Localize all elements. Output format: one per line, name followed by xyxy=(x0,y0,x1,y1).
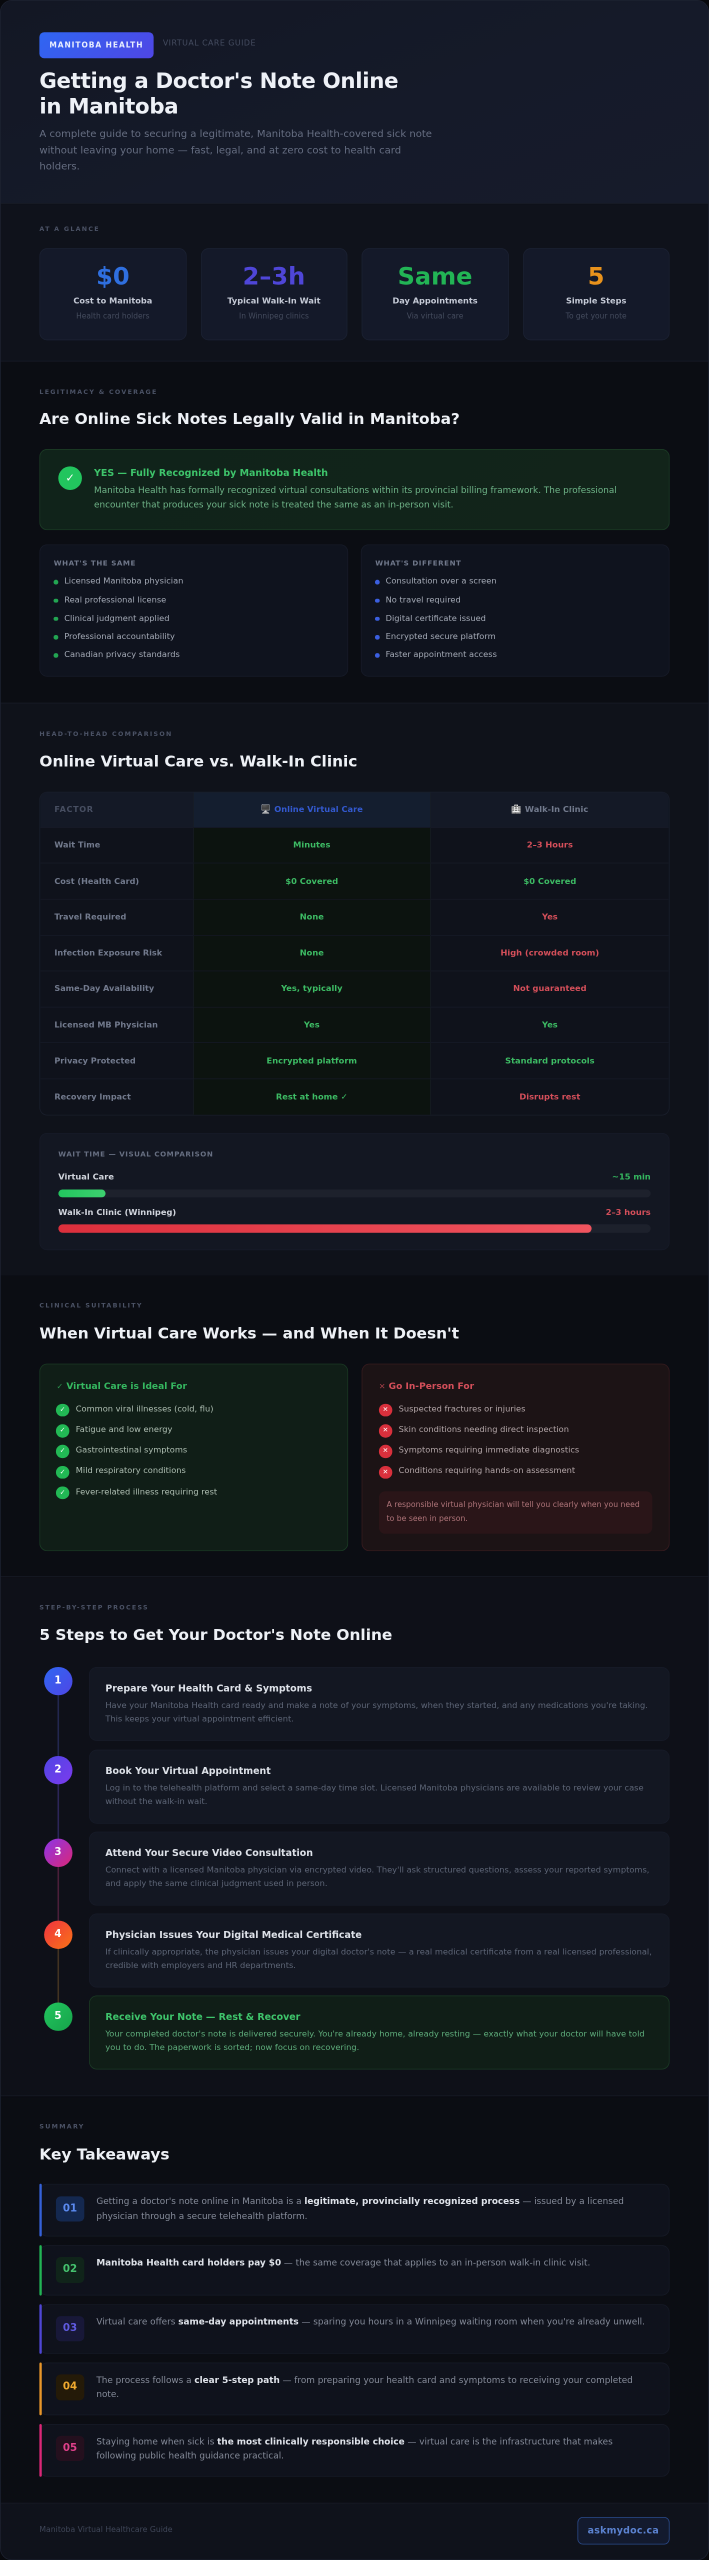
connector: step 4 to 5 xyxy=(57,1949,59,2002)
list heading: WHAT'S DIFFERENT xyxy=(375,560,461,568)
row: recovery: Recovery Impact xyxy=(54,1093,131,1102)
item: ✕ xyxy=(383,1406,388,1414)
list item: Digital certificate issued xyxy=(386,614,486,623)
section heading: When Virtual Care Works — and When It Doesn't xyxy=(39,1324,459,1342)
stat note: Health card holders xyxy=(76,312,150,320)
accent bar xyxy=(39,2245,42,2295)
step text xyxy=(105,1783,644,1806)
step text: Log in to the telehealth platform and select a same-day time slot. Licensed Manitoba physicians are available to review your case xyxy=(105,1783,644,1793)
item xyxy=(56,1424,172,1438)
footer link badge xyxy=(577,2517,670,2545)
section label: SUMMARY xyxy=(39,2123,85,2130)
row: same-day: Not guaranteed xyxy=(513,984,587,994)
row: travel: Travel Required xyxy=(54,912,126,922)
subtitle: without leaving your home — fast, legal, and at zero cost to health card xyxy=(39,145,401,156)
list heading: WHAT'S THE SAME xyxy=(54,560,136,568)
list item: Canadian privacy standards xyxy=(64,650,180,660)
takeaway 1 xyxy=(39,2184,670,2237)
row: same-day xyxy=(40,971,669,1007)
item xyxy=(378,1466,575,1479)
row: cost: $0 Covered xyxy=(285,876,338,886)
item: Common viral illnesses (cold, flu) xyxy=(76,1404,213,1414)
step number 1 xyxy=(44,1667,72,1696)
stat card: wait xyxy=(200,248,347,340)
stat label: Simple Steps xyxy=(566,296,626,305)
row: travel xyxy=(40,900,669,936)
step number 4: 4 xyxy=(54,1928,61,1940)
icon: check xyxy=(58,466,82,490)
bar label: Walk-In Clinic (Winnipeg) xyxy=(58,1208,176,1217)
section label: LEGITIMACY & COVERAGE xyxy=(39,388,158,395)
step text: Your completed doctor's note is delivered securely. You're already home, already resting — exactly what your doctor will have told xyxy=(105,2029,645,2039)
table header: Walk-In Clinic xyxy=(525,805,588,814)
accent bar xyxy=(39,2362,42,2415)
row: cost: $0 Covered xyxy=(523,876,576,886)
panel: what's different xyxy=(361,544,670,677)
number badge: 03 xyxy=(63,2322,77,2334)
row: recovery xyxy=(54,1079,580,1115)
step text xyxy=(105,2029,645,2052)
stat value: $0 xyxy=(96,263,130,291)
panel: clinical suitability xyxy=(0,1276,709,1577)
panel: step-by-step process xyxy=(0,1577,709,2097)
row: physician xyxy=(40,1007,669,1043)
list item: Licensed Manitoba physician xyxy=(64,577,183,586)
item: Suspected fractures or injuries xyxy=(399,1404,525,1414)
number badge xyxy=(56,2436,85,2461)
footer xyxy=(0,2503,709,2560)
number badge xyxy=(56,2316,85,2342)
section heading: Online Virtual Care vs. Walk-In Clinic xyxy=(39,753,357,771)
bar chart: wait time xyxy=(39,1133,670,1250)
takeaway text xyxy=(96,2436,613,2461)
hero header xyxy=(0,0,709,204)
stat note: In Winnipeg clinics xyxy=(239,312,309,320)
item: Symptoms requiring immediate diagnostics xyxy=(399,1446,579,1455)
step text xyxy=(105,1701,648,1724)
step title: Attend Your Secure Video Consultation xyxy=(105,1847,313,1858)
step text: without the walk-in wait. xyxy=(105,1797,207,1806)
row: privacy: Privacy Protected xyxy=(54,1056,136,1066)
item: ✕ xyxy=(383,1447,388,1455)
item xyxy=(56,1466,186,1479)
step text: If clinically appropriate, the physician issues your digital doctor's note — a real medical certificate from a real licensed professional, xyxy=(105,1947,652,1957)
section heading: Are Online Sick Notes Legally Valid in Manitoba? xyxy=(39,410,460,428)
section heading: Key Takeaways xyxy=(39,2145,170,2163)
item: Mild respiratory conditions xyxy=(76,1466,186,1476)
stat note: To get your note xyxy=(566,312,627,320)
panel heading: ✓ Virtual Care is Ideal For xyxy=(57,1380,187,1392)
item: ✓ xyxy=(60,1406,65,1414)
callout text: Manitoba Health has formally recognized virtual consultations within its provincial billing framework. The professional xyxy=(94,485,617,496)
row: physician: Yes xyxy=(542,1020,558,1030)
stat label: Day Appointments xyxy=(392,296,478,305)
stat label: Cost to Manitoba xyxy=(73,296,152,305)
callout text xyxy=(94,485,617,510)
panel: at a glance xyxy=(0,204,709,362)
step title: Prepare Your Health Card & Symptoms xyxy=(105,1683,312,1694)
row: infection risk: Infection Exposure Risk xyxy=(54,948,162,958)
step text: and apply the same clinical judgment used in person. xyxy=(105,1879,327,1888)
panel heading: ✕ Go In-Person For xyxy=(379,1380,474,1392)
takeaway text: The process follows a clear 5-step path — from preparing your health card and symptoms to receiving your completed xyxy=(96,2375,633,2385)
step number 5: 5 xyxy=(54,2010,61,2022)
table header: 🏥 xyxy=(511,805,522,815)
connector: step 1 to 2 xyxy=(57,1696,59,1756)
note text xyxy=(386,1501,640,1524)
takeaway text: Virtual care offers same-day appointments — sparing you hours in a Winnipeg waiting room when you're already unwell. xyxy=(96,2317,645,2327)
row: privacy: Standard protocols xyxy=(505,1056,595,1066)
row: infection risk xyxy=(40,936,669,971)
step title: Book Your Virtual Appointment xyxy=(105,1765,271,1776)
table header: FACTOR xyxy=(54,805,94,814)
item xyxy=(56,1486,217,1500)
row: privacy xyxy=(40,1043,669,1079)
step text xyxy=(105,1947,652,1970)
row: physician: Yes xyxy=(304,1020,320,1030)
takeaway text xyxy=(96,2197,624,2221)
takeaway 5 xyxy=(39,2424,670,2477)
list item: Encrypted secure platform xyxy=(386,632,496,641)
table header: 🖥️ xyxy=(261,805,271,815)
number badge: 04 xyxy=(63,2381,77,2392)
step number 5 xyxy=(44,2002,72,2031)
callout text: encounter that produces your sick note is treated the same as an in-person visit. xyxy=(94,500,453,510)
step title: Receive Your Note — Rest & Recover xyxy=(105,2011,300,2022)
list item: No travel required xyxy=(386,595,461,605)
row: wait time xyxy=(40,828,669,864)
comparison table xyxy=(39,791,670,1115)
row: travel: Yes xyxy=(542,912,558,922)
takeaway text: Manitoba Health card holders pay $0 — the same coverage that applies to an in-person walk-in clinic visit. xyxy=(96,2258,590,2268)
number badge xyxy=(56,2196,85,2222)
takeaway 3 xyxy=(39,2304,670,2354)
chart title: WAIT TIME — VISUAL COMPARISON xyxy=(58,1151,213,1159)
accent bar xyxy=(39,2424,42,2477)
step number 2: 2 xyxy=(54,1764,61,1776)
connector: step 2 to 3 xyxy=(57,1785,59,1838)
callout: yes recognized xyxy=(39,449,670,530)
item: Fatigue and low energy xyxy=(76,1425,172,1434)
title: Getting a Doctor's Note Online xyxy=(39,69,398,93)
stat card: steps xyxy=(523,248,670,340)
stat note: Via virtual care xyxy=(407,312,463,320)
step text: Connect with a licensed Manitoba physician via encrypted video. They'll ask structured questions, assess your reported symptoms, xyxy=(105,1865,649,1875)
bar value: ~15 min xyxy=(612,1173,651,1182)
step text: This keeps your virtual appointment efficient. xyxy=(105,1714,294,1724)
takeaway 4 xyxy=(39,2362,670,2415)
step number 2 xyxy=(44,1756,72,1785)
list item: Real professional license xyxy=(64,595,166,605)
step card 2 xyxy=(89,1749,670,1824)
subtitle xyxy=(39,128,432,173)
item: ✕ xyxy=(383,1427,388,1435)
takeaway text xyxy=(96,2375,633,2400)
step number 4 xyxy=(44,1920,72,1949)
item: ✓ xyxy=(60,1447,65,1455)
takeaway text: following public health guidance practical. xyxy=(96,2451,284,2461)
callout title: YES — Fully Recognized by Manitoba Health xyxy=(94,467,328,478)
row: cost xyxy=(40,864,669,900)
note text: to be seen in person. xyxy=(387,1515,468,1524)
step title: Physician Issues Your Digital Medical Certificate xyxy=(105,1929,362,1940)
title: in Manitoba xyxy=(39,95,178,119)
list item: Professional accountability xyxy=(64,632,175,641)
step number 1: 1 xyxy=(54,1675,61,1687)
panel: head-to-head comparison xyxy=(0,703,709,1276)
row: cost: Cost (Health Card) xyxy=(54,876,139,886)
icon: check: ✓ xyxy=(65,472,75,484)
bar label: Virtual Care xyxy=(58,1173,114,1182)
item: Conditions requiring hands-on assessment xyxy=(399,1466,575,1476)
item: ✕ xyxy=(383,1468,388,1476)
step card 4 xyxy=(89,1913,670,1988)
stat card: same day xyxy=(362,248,509,340)
item: ✓ xyxy=(60,1427,65,1435)
item xyxy=(56,1444,187,1458)
bar: walk-in clinic xyxy=(58,1224,651,1233)
number badge xyxy=(56,2257,85,2283)
list item: Consultation over a screen xyxy=(386,577,497,586)
item xyxy=(56,1404,213,1416)
row: recovery: Rest at home ✓ xyxy=(276,1093,348,1102)
subtitle: A complete guide to securing a legitimate, Manitoba Health-covered sick note xyxy=(39,128,432,140)
section heading: 5 Steps to Get Your Doctor's Note Online xyxy=(39,1626,392,1644)
list item: Faster appointment access xyxy=(386,650,497,660)
panel: go in person xyxy=(361,1363,670,1551)
step card 5 xyxy=(89,1995,670,2070)
panel: ideal for virtual care xyxy=(39,1363,348,1551)
section label: CLINICAL SUITABILITY xyxy=(39,1302,143,1310)
stat card: cost xyxy=(39,248,186,340)
row: privacy: Encrypted platform xyxy=(267,1056,357,1066)
row: same-day: Same-Day Availability xyxy=(54,984,154,994)
stat value: 5 xyxy=(588,263,605,291)
item xyxy=(378,1444,579,1458)
panel: legitimacy and coverage xyxy=(0,362,709,703)
number badge: 01 xyxy=(63,2202,77,2214)
item: Gastrointestinal symptoms xyxy=(76,1446,187,1455)
section label: AT A GLANCE xyxy=(39,225,100,232)
badge: Manitoba Health xyxy=(39,32,153,58)
stat value: Same xyxy=(398,263,472,291)
section label: STEP-BY-STEP PROCESS xyxy=(39,1604,149,1611)
item: Fever-related illness requiring rest xyxy=(76,1487,217,1496)
accent bar xyxy=(39,2184,42,2237)
subtitle: holders. xyxy=(39,161,80,173)
row: physician: Licensed MB Physician xyxy=(54,1020,158,1030)
takeaway text: Staying home when sick is the most clinically responsible choice — virtual care is the infrastructure that makes xyxy=(96,2436,613,2447)
title xyxy=(39,69,398,119)
takeaway 2 xyxy=(39,2245,670,2295)
connector: step 3 to 4 xyxy=(57,1867,59,1920)
panel: key takeaways xyxy=(0,2097,709,2503)
number badge: 02 xyxy=(63,2264,77,2275)
table header: Online Virtual Care xyxy=(274,805,363,814)
footer text: Manitoba Virtual Healthcare Guide xyxy=(39,2525,172,2534)
stat value: 2–3h xyxy=(243,263,305,291)
step number 3 xyxy=(44,1838,72,1867)
step card 3 xyxy=(89,1831,670,1906)
panel: what's the same xyxy=(39,544,348,677)
row: travel: None xyxy=(300,912,324,922)
row: same-day: Yes, typically xyxy=(281,984,343,994)
section label: HEAD-TO-HEAD COMPARISON xyxy=(39,730,173,737)
item: Skin conditions needing direct inspection xyxy=(399,1425,569,1434)
takeaway text: note. xyxy=(96,2389,119,2400)
item: ✓ xyxy=(60,1489,65,1497)
item: ✓ xyxy=(60,1468,65,1476)
list item: Clinical judgment applied xyxy=(64,614,169,623)
number badge: 05 xyxy=(63,2442,77,2454)
takeaway text: physician through a secure telehealth platform. xyxy=(96,2211,307,2221)
stat label: Typical Walk-In Wait xyxy=(227,296,321,305)
item xyxy=(378,1424,569,1438)
step text: credible with employers and HR departments. xyxy=(105,1961,296,1970)
item xyxy=(378,1404,525,1416)
row: wait time: 2–3 Hours xyxy=(527,840,573,850)
step card 1 xyxy=(89,1667,670,1741)
bar value: 2–3 hours xyxy=(606,1208,651,1217)
bar: virtual care xyxy=(58,1189,651,1198)
step text: Have your Manitoba Health card ready and make a note of your symptoms, when they started, and any medications you're taking. xyxy=(105,1701,648,1710)
table header xyxy=(40,792,669,828)
step text xyxy=(105,1865,649,1888)
takeaway text: Getting a doctor's note online in Manitoba is a legitimate, provincially recognized process — issued by a licensed xyxy=(96,2197,624,2207)
number badge xyxy=(56,2374,85,2400)
row: infection risk: None xyxy=(300,948,324,958)
step number 3: 3 xyxy=(54,1846,61,1858)
badge: Manitoba Health: MANITOBA HEALTH xyxy=(49,41,143,49)
row: infection risk: High (crowded room) xyxy=(500,948,599,958)
row: wait time: Wait Time xyxy=(54,840,100,850)
row: wait time: Minutes xyxy=(293,840,330,850)
step text: you to do. The paperwork is sorted; now focus on recovering. xyxy=(105,2043,359,2052)
eyebrow: virtual care guide: VIRTUAL CARE GUIDE xyxy=(163,40,256,48)
note text: A responsible virtual physician will tell you clearly when you need xyxy=(387,1501,640,1509)
footer link badge: askmydoc.ca xyxy=(588,2525,659,2536)
accent bar xyxy=(39,2304,42,2354)
row: recovery: Disrupts rest xyxy=(519,1093,580,1102)
note callout xyxy=(379,1492,653,1534)
